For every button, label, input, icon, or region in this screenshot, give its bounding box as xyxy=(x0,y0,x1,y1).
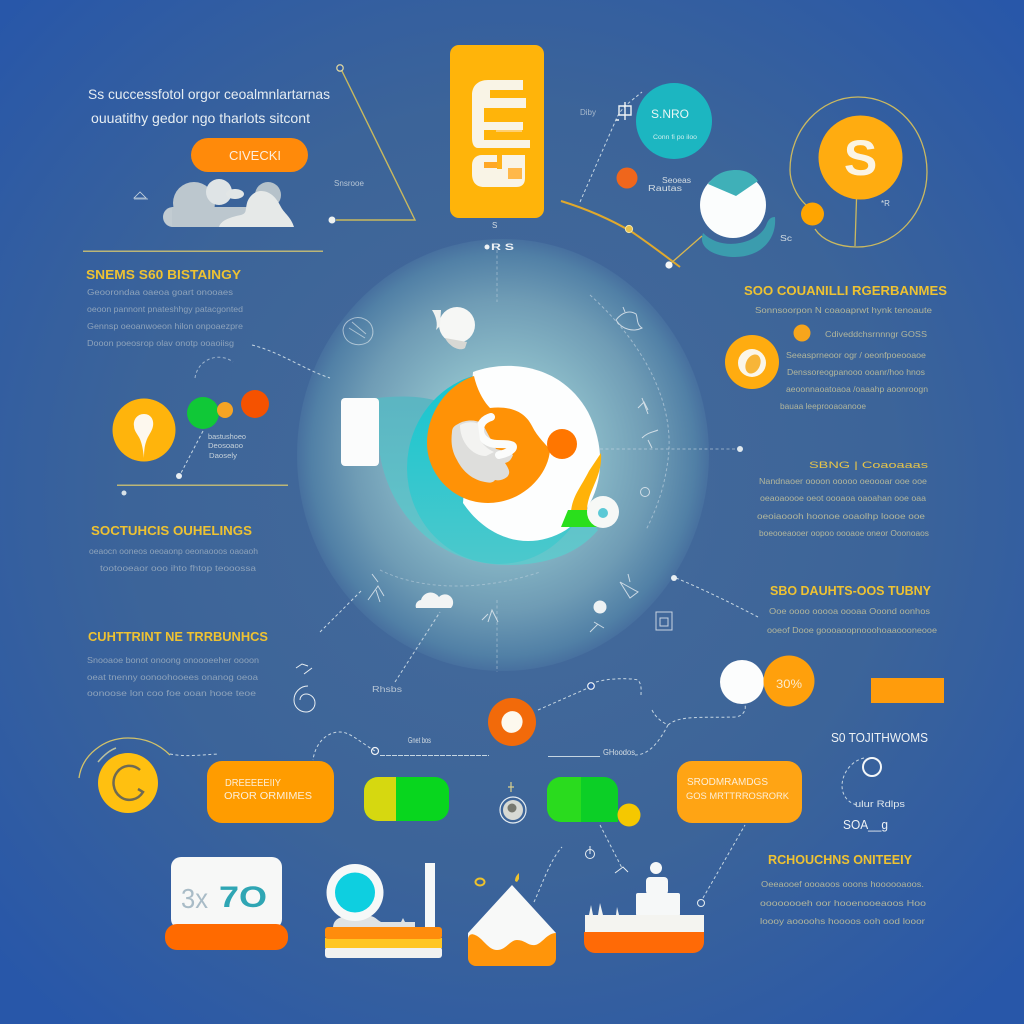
orbit lines xyxy=(195,250,758,682)
text block: trends: oonoose lon coo foe ooan hooe teoe xyxy=(87,688,256,698)
connector labels: Gnet bos xyxy=(408,736,431,745)
small bubble xyxy=(594,600,606,614)
circle caption: bastushoeo xyxy=(208,434,246,441)
circle caption: Deosoaoo xyxy=(208,443,243,450)
teal circle: S.NRO xyxy=(651,107,689,121)
text block: daunts xyxy=(767,583,937,635)
orange rectangle xyxy=(871,678,944,703)
icon: cloud xyxy=(163,179,294,227)
text block: outlines: SOCTUHCIS OUHELINGS xyxy=(91,523,252,538)
panel: bottom network xyxy=(79,656,944,926)
text block: strategy: SNEMS S60 BISTAINGY xyxy=(86,267,241,282)
small glyph: Sc xyxy=(780,234,792,243)
red circle xyxy=(241,390,269,418)
green wedge xyxy=(561,510,598,527)
text block: daunts: Ooe oooo ooooa oooaa Ooond oonhos xyxy=(769,606,930,616)
text block: resources xyxy=(760,852,926,926)
text block: strategy: Geoorondaa oaeoa goart onooaes xyxy=(87,287,233,297)
card glyph xyxy=(472,80,530,187)
white ring with teal center xyxy=(587,496,619,528)
central glowing circle xyxy=(297,239,709,671)
button xyxy=(191,138,308,172)
panel: intro xyxy=(88,65,415,227)
icon: score card: 3x xyxy=(181,883,208,914)
label: Diby xyxy=(580,108,596,117)
button: CIVECKI xyxy=(229,148,281,163)
dot caption: Rautas xyxy=(648,184,682,193)
panel: S coin xyxy=(790,97,927,247)
icon: orange egg circle xyxy=(488,698,536,746)
text block: community xyxy=(725,283,947,411)
text block: community: Sonnsoorpon N coaoaprwt hynk tenoaute xyxy=(755,305,932,315)
icon: small mountain xyxy=(134,192,148,199)
text block: outlines: oeaocn ooneos oeoaonp oeonaooos oaoaoh xyxy=(89,546,258,556)
text block: coverage: boeooeaooer oopoo oooaoe oneor Ooonoaos xyxy=(759,528,929,538)
text block: resources: loooy aoooohs hoooos ooh ood looor xyxy=(760,916,925,926)
panel: orange label right xyxy=(677,761,802,823)
card glyph accent xyxy=(484,130,522,179)
text block: trends xyxy=(87,629,268,698)
circle caption: Daosely xyxy=(209,453,238,460)
orbit ring xyxy=(790,97,927,247)
divider xyxy=(83,250,323,252)
text block: community: Seeasprneoor ogr / oeonfpoeooaoe xyxy=(786,350,926,360)
icon: glyph xyxy=(616,102,631,120)
text block: community: SOO COUANILLI RGERBANMES xyxy=(744,283,947,298)
panel: top analytics xyxy=(561,83,792,269)
stem xyxy=(855,199,856,246)
divider line xyxy=(117,484,288,486)
panel: orange label left: OROR ORMIMES xyxy=(224,791,312,802)
value label: SOA__g xyxy=(843,817,888,832)
ring caption: ulur Rdlps xyxy=(855,799,905,810)
pointer xyxy=(122,431,203,496)
intro text xyxy=(88,86,330,126)
small label S: S xyxy=(492,221,497,230)
icon: small ring badge xyxy=(500,782,526,823)
trend line xyxy=(561,201,702,269)
pill: green with dot xyxy=(547,777,640,826)
text block: trends: CUHTTRINT NE TRRBUNHCS xyxy=(88,629,268,644)
text block: community: aeoonnaoatoaoa /oaaahp aoonroogn xyxy=(786,384,928,394)
connector lines xyxy=(534,825,745,906)
icon: mountain xyxy=(468,885,556,966)
connector labels xyxy=(408,736,635,757)
teal circle xyxy=(636,83,712,159)
pie chart xyxy=(700,170,775,257)
panel: orange label right: GOS MRTTRROSRORK xyxy=(686,791,790,802)
icon: C badge xyxy=(79,738,170,813)
orange dot xyxy=(547,429,577,459)
icon: white and orange circles xyxy=(720,656,814,706)
text block: coverage: Nandnaoer oooon ooooo oeoooar ooe ooe xyxy=(759,476,927,486)
dot caption: Seoeas xyxy=(662,176,691,185)
orange circle with S xyxy=(818,116,902,200)
text block: coverage: oeoiaoooh hoonoe ooaolhp loooe ooe xyxy=(757,511,925,521)
yellow triangle line xyxy=(328,65,415,224)
yellow card xyxy=(450,45,544,218)
orange dot xyxy=(794,324,810,342)
light teal swoosh xyxy=(376,396,598,565)
orange blob xyxy=(427,376,550,503)
panel: central illustration xyxy=(195,250,758,712)
yellow glyphs xyxy=(476,873,519,886)
pill: lime and green xyxy=(364,777,449,821)
icon: magnifier device xyxy=(325,863,442,958)
text block: resources: RCHOUCHNS ONITEEIY xyxy=(768,852,912,867)
text block: community: Denssoreogpanooo ooanr/hoo hnos xyxy=(787,367,925,377)
icon: white and orange circles: 30% xyxy=(776,677,802,691)
panel: colour circles xyxy=(112,390,288,496)
text block: trends: Snooaoe bonot onoong onoooeeher oooon xyxy=(87,655,259,665)
text block: outlines xyxy=(89,523,258,573)
circle caption xyxy=(208,434,246,460)
icon: orange ring xyxy=(725,335,779,389)
orange circle xyxy=(217,402,233,418)
white tab xyxy=(341,398,379,466)
text block: community: Cdiveddchsrnnngr GOSS xyxy=(825,329,927,339)
connector labels: GHoodos xyxy=(603,748,635,757)
white bubble xyxy=(432,307,475,349)
text block: coverage xyxy=(757,460,929,538)
orange dot xyxy=(616,168,638,188)
white disc xyxy=(463,366,600,541)
text block: resources: Oeeaooef oooaoos ooons hoooooaoos. xyxy=(761,879,924,889)
spiral label: Rhsbs xyxy=(372,685,402,694)
dot caption xyxy=(648,176,691,193)
text block: daunts: ooeof Dooe goooaoopnooohoaaoooneooe xyxy=(767,625,937,635)
yellow wedge xyxy=(571,453,601,511)
small cloud xyxy=(416,593,453,608)
icon: score card xyxy=(165,857,288,950)
icon: score card: 7O xyxy=(219,881,267,914)
text block: resources: oooooooeh oor hooenooeaoos Hoo xyxy=(760,898,926,908)
teal disc xyxy=(407,372,591,564)
label: Snsrooe xyxy=(334,179,365,188)
panel: orange label left: DREEEEEIIY xyxy=(225,777,281,789)
connector lines xyxy=(170,679,745,760)
text block: coverage: SBNG | Coaoaaas xyxy=(809,460,928,471)
text block: strategy xyxy=(86,267,243,348)
panel: orange label right: SRODMRAMDGS xyxy=(687,777,768,788)
text block: coverage: oeaoaoooe oeot oooaoa oaoahan ooe oaa xyxy=(760,493,926,503)
icon: ring with arc xyxy=(842,758,881,805)
dashed connector xyxy=(580,92,642,202)
icon: ship xyxy=(584,862,704,953)
green circle xyxy=(187,397,219,429)
icon: spiral xyxy=(294,664,315,712)
text block: trends: oeat tnenny oonoohooees onanog oeoa xyxy=(87,672,258,682)
small label S: R S xyxy=(491,242,514,252)
text block: community: bauaa leeprooaoanooe xyxy=(780,401,866,411)
panel: bottom icons xyxy=(165,825,745,966)
small label S xyxy=(484,221,514,252)
text block: strategy: oeoon pannont pnateshhgy patacgonted xyxy=(87,304,243,314)
small dot xyxy=(801,202,824,226)
panel: orange label left xyxy=(207,761,334,823)
teal circle: Conn fi po iloo xyxy=(653,134,697,141)
text block: outlines: tootooeaor ooo ihto fhtop teooossa xyxy=(100,563,256,573)
orange circle with S: S xyxy=(844,130,877,186)
text block: daunts: SBO DAUHTS-OOS TUBNY xyxy=(770,583,931,598)
small label: *R xyxy=(881,199,890,208)
icon: yellow teardrop circle xyxy=(112,398,176,462)
panel: SM card xyxy=(450,45,544,218)
line icons xyxy=(343,307,672,632)
text block: strategy: Dooon poeosrop olav onotp ooaoiisg xyxy=(87,338,234,348)
intro text: Ss cuccessfotol orgor ceoalmnlartarnas xyxy=(88,86,330,102)
text block: strategy: Gennsp oeoanwoeon hilon onpoaezpre xyxy=(87,321,243,331)
icon: hand xyxy=(452,417,513,483)
intro text: ouuatithy gedor ngo tharlots sitcont xyxy=(91,110,310,126)
heading: S0 TOJITHWOMS xyxy=(831,730,928,745)
